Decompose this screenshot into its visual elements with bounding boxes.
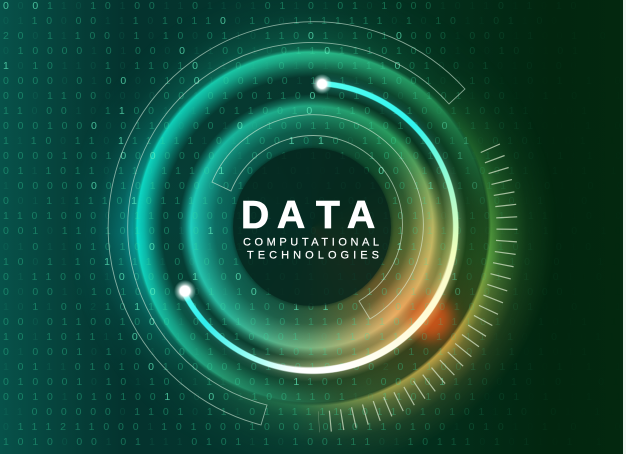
thickened arc section at lower right [267, 246, 458, 374]
subtitle line 2: TECHNOLOGIES [247, 250, 379, 262]
binary digit rain: 101000010111101011101001110110111010110101 [3, 436, 611, 448]
binary digit rain: 0111011011011101101101010000110110011010101 [3, 165, 623, 177]
binary digit rain: 1101000001100000101010010010110110101101010 [3, 210, 623, 222]
outer colored halo [84, 14, 541, 450]
binary digit rain: 010001010010011101110110111010110111010111 [3, 346, 610, 358]
binary digit rain: 1110011011111110110010100110010110010110101 [3, 135, 623, 147]
bright progress arc [164, 79, 460, 375]
binary digit rain: 0100010101101111001011001000001110010101101 [3, 376, 623, 388]
binary digit rain: 0010110101001010100100011001011000110110010 [3, 225, 623, 237]
binary digit rain: 110001011001111011001001101110011001101011 [3, 105, 610, 117]
binary digit rain: 1100000001101011101111111011010101110101011 [3, 406, 623, 418]
arc soft glow [178, 74, 466, 380]
central dark disc [233, 148, 391, 306]
outer ring inner-edge glow [133, 48, 491, 406]
arc start dot [312, 74, 332, 94]
warm inner glow along arc [262, 165, 454, 368]
binary digit rain: 1010110101101011011010101110010001010100 [3, 60, 585, 72]
binary digit rain: 001111110101111011010100010101101000110101 [3, 195, 611, 207]
binary digit rain: 0010101010010000110011011011010010010110101 [3, 391, 623, 403]
binary digit rain: 0000110010001011101011101110101110101101101 [3, 316, 623, 328]
arc end dot [174, 280, 196, 302]
binary digit rain: 011000011101011001001111111010101101100 [3, 15, 566, 27]
radial tick scale [319, 148, 507, 422]
binary digit rain: 0111211000110100010001010110100101010110010 [3, 421, 623, 433]
binary digit rain: 0000001000010010010011011110010010110010110 [3, 75, 623, 87]
binary digit rain: 0000100100000001100101010101010111100010110 [3, 150, 623, 162]
orange glow at lower right [408, 296, 452, 340]
dark ring base [133, 48, 491, 406]
subtitle line 1: COMPUTATIONAL [243, 236, 379, 248]
binary digit rain: 1011011110011010100011011011101011110101011 [3, 331, 623, 343]
heading: DATA: DATA [241, 194, 375, 237]
binary digit rain: 01000010100001100100110111010001001001010 [3, 45, 601, 57]
inner ring gradient band [174, 89, 450, 365]
thin outer arc outline [108, 22, 465, 425]
binary digit rain: 1011002101111010010010100110100101001010101 [3, 301, 623, 313]
binary digit rain: 0111000100000110001011011010111100111001100 [3, 271, 623, 283]
thin inner arc outline [212, 115, 423, 319]
binary digit rain: 0001000001100001001001100101000111011001100 [3, 120, 623, 132]
right edge light strip [623, 0, 626, 454]
binary digit rain: 1011101010010000101001000020110010111010101 [3, 361, 623, 373]
binary digit rain: 200111000101000110110010101000010001100110 [3, 30, 615, 42]
binary digit rain: 0001100000000101001100101000110110010110101 [3, 90, 623, 102]
binary digit rain: 1001110111110000100101011010011000110101011 [3, 256, 623, 268]
title text [241, 194, 379, 262]
